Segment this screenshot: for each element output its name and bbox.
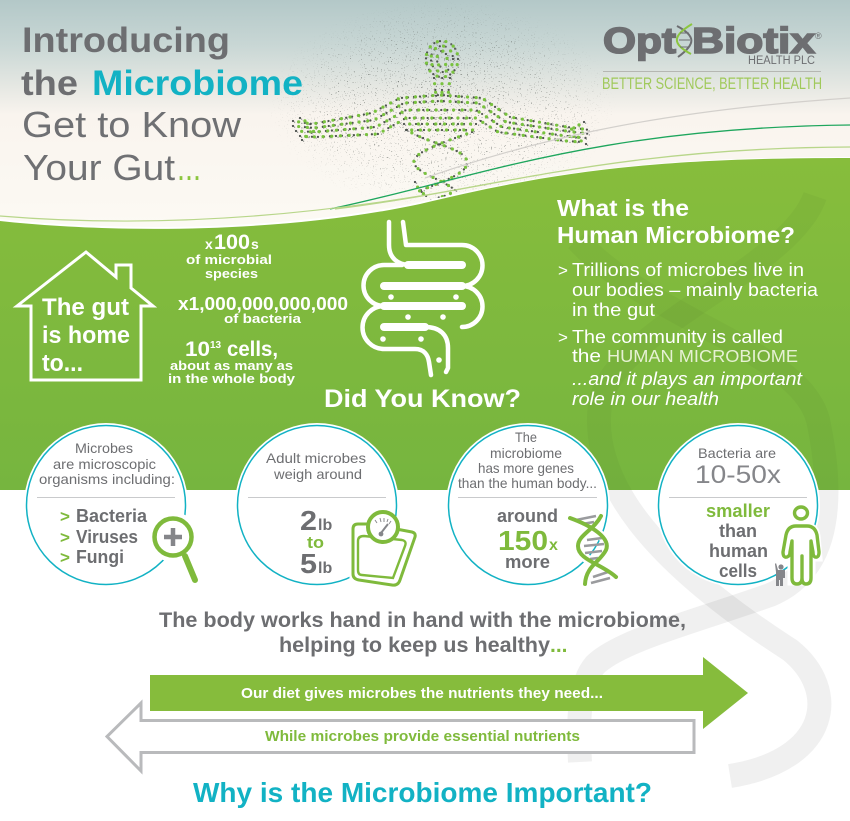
panel: microbes: are microscopic xyxy=(53,456,156,472)
gut facts: s xyxy=(251,236,259,252)
panel: microbes xyxy=(24,423,195,587)
title: Get to Know xyxy=(22,104,242,145)
panel: bacteria size: Bacteria are xyxy=(698,445,776,461)
panel: what is the human microbiome: the xyxy=(572,346,601,366)
panel: microbes: > xyxy=(60,507,70,526)
icon: house xyxy=(17,252,153,380)
green band xyxy=(0,157,850,490)
panel: microbe weight: lb xyxy=(318,560,332,577)
panel: microbiome genes: more xyxy=(505,552,550,572)
speckle cloud around figure xyxy=(272,4,612,203)
panel: microbe weight: Adult microbes xyxy=(266,450,366,466)
text: body and microbiome statement xyxy=(159,609,686,657)
panel: what is the human microbiome: HUMAN MICROBIOME xyxy=(607,346,798,366)
gut facts: of microbial xyxy=(186,252,272,267)
panel: what is the human microbiome xyxy=(557,195,819,409)
panel: what is the human microbiome: What is the xyxy=(557,195,689,221)
icon: logo DNA xyxy=(677,24,692,57)
icon: magnifying glass xyxy=(151,515,195,580)
panel: microbiome genes: than the human body... xyxy=(458,475,597,491)
panel: microbe weight xyxy=(235,423,415,587)
text: body and microbiome statement: ... xyxy=(550,634,568,657)
title: Introducing xyxy=(22,21,230,60)
panel: bacteria size: than xyxy=(719,521,757,541)
icon: intestine xyxy=(363,222,482,375)
panel: microbes: Bacteria xyxy=(76,506,148,526)
panel: microbiome genes: 150 xyxy=(498,525,548,556)
panel: what is the human microbiome: > xyxy=(558,261,568,280)
arrow: microbes to body: While microbes provide essential nutrients xyxy=(265,729,580,745)
icon: large person xyxy=(783,507,819,584)
text: body and microbiome statement: The body works hand in hand with the microbiome, xyxy=(159,609,686,632)
panel: microbe weight: weigh around xyxy=(273,466,362,482)
gut facts: of bacteria xyxy=(224,311,302,326)
title: the xyxy=(21,64,78,103)
title xyxy=(21,21,303,188)
panel: microbes: organisms including: xyxy=(39,471,175,487)
house text: The gut xyxy=(42,294,129,321)
panel: what is the human microbiome: in the gut xyxy=(572,300,655,320)
gut facts: 13 xyxy=(210,340,222,351)
logo: OptiBiotix: Opt xyxy=(603,20,676,61)
gut facts: x xyxy=(205,236,213,252)
panel: microbiome genes xyxy=(446,423,616,587)
gut facts: species xyxy=(205,266,258,281)
panel: bacteria size: 10-50x xyxy=(695,461,782,489)
watermark: DNA helix xyxy=(577,196,826,776)
heading: did you know: Did You Know? xyxy=(324,385,521,413)
logo: OptiBiotix: ® xyxy=(815,31,822,41)
panel: microbiome genes: x xyxy=(549,537,558,554)
arrow: diet to microbes xyxy=(150,657,748,729)
panel: what is the human microbiome: role in our health xyxy=(572,389,719,409)
gut facts: x1,000,000,000,000 xyxy=(178,294,348,314)
panel: microbes: > xyxy=(60,528,70,547)
panel: microbes: Fungi xyxy=(76,547,124,567)
panel: microbes: Microbes xyxy=(75,440,133,456)
sky background xyxy=(0,0,850,230)
panel: microbe weight: to xyxy=(307,533,324,552)
heading: why is the microbiome important: Why is the Microbiome Important? xyxy=(193,777,652,808)
panel: microbiome genes: microbiome xyxy=(490,445,562,461)
arrow: microbes to body xyxy=(107,703,694,771)
gut facts: cells, xyxy=(227,338,278,361)
panel: microbiome genes: around xyxy=(497,506,558,526)
panel: bacteria size: human xyxy=(709,541,768,561)
logo: OptiBiotix xyxy=(602,20,822,93)
title: Microbiome xyxy=(92,64,303,103)
text: body and microbiome statement: helping to keep us healthy xyxy=(279,634,550,657)
title: Your Gut xyxy=(23,147,175,188)
panel: microbes: Viruses xyxy=(76,527,138,547)
panel: what is the human microbiome: The community is called xyxy=(572,327,783,347)
logo: OptiBiotix: HEALTH PLC xyxy=(748,55,815,67)
panel: microbes: > xyxy=(60,548,70,567)
panel: what is the human microbiome: > xyxy=(558,328,568,347)
panel: what is the human microbiome: Trillions of microbes live in xyxy=(572,260,804,280)
gut facts: in the whole body xyxy=(168,371,296,386)
panel: bacteria size xyxy=(656,423,820,587)
icon: small person xyxy=(775,563,785,586)
icon: weighing scale xyxy=(353,512,415,585)
panel: what is the human microbiome: ...and it plays an important xyxy=(572,369,803,389)
house text xyxy=(42,294,130,377)
panel: microbe weight: 2 xyxy=(300,505,317,536)
arrow: diet to microbes: Our diet gives microbes the nutrients they need... xyxy=(241,685,603,702)
panel: microbiome genes: The xyxy=(515,429,537,445)
gut facts: about as many as xyxy=(170,358,293,373)
gut facts xyxy=(168,231,348,386)
panel: microbe weight: lb xyxy=(318,517,332,534)
panel: what is the human microbiome: Human Microbiome? xyxy=(557,222,795,248)
house text: to... xyxy=(42,350,83,377)
human figure made of dots xyxy=(293,41,592,200)
panel: bacteria size: cells xyxy=(719,561,757,581)
panel: what is the human microbiome: our bodies – mainly bacteria xyxy=(572,280,819,300)
panel: microbiome genes: has more genes xyxy=(478,460,574,476)
panel: bacteria size: smaller xyxy=(706,501,770,521)
panel: microbe weight: 5 xyxy=(300,548,317,579)
logo: OptiBiotix: Biotix xyxy=(692,20,815,61)
icon: DNA helix xyxy=(570,516,616,584)
swoosh lines xyxy=(0,98,850,221)
house text: is home xyxy=(42,322,130,349)
gut facts: 100 xyxy=(214,231,250,254)
title: ... xyxy=(177,147,201,188)
gut facts: 10 xyxy=(185,338,210,361)
